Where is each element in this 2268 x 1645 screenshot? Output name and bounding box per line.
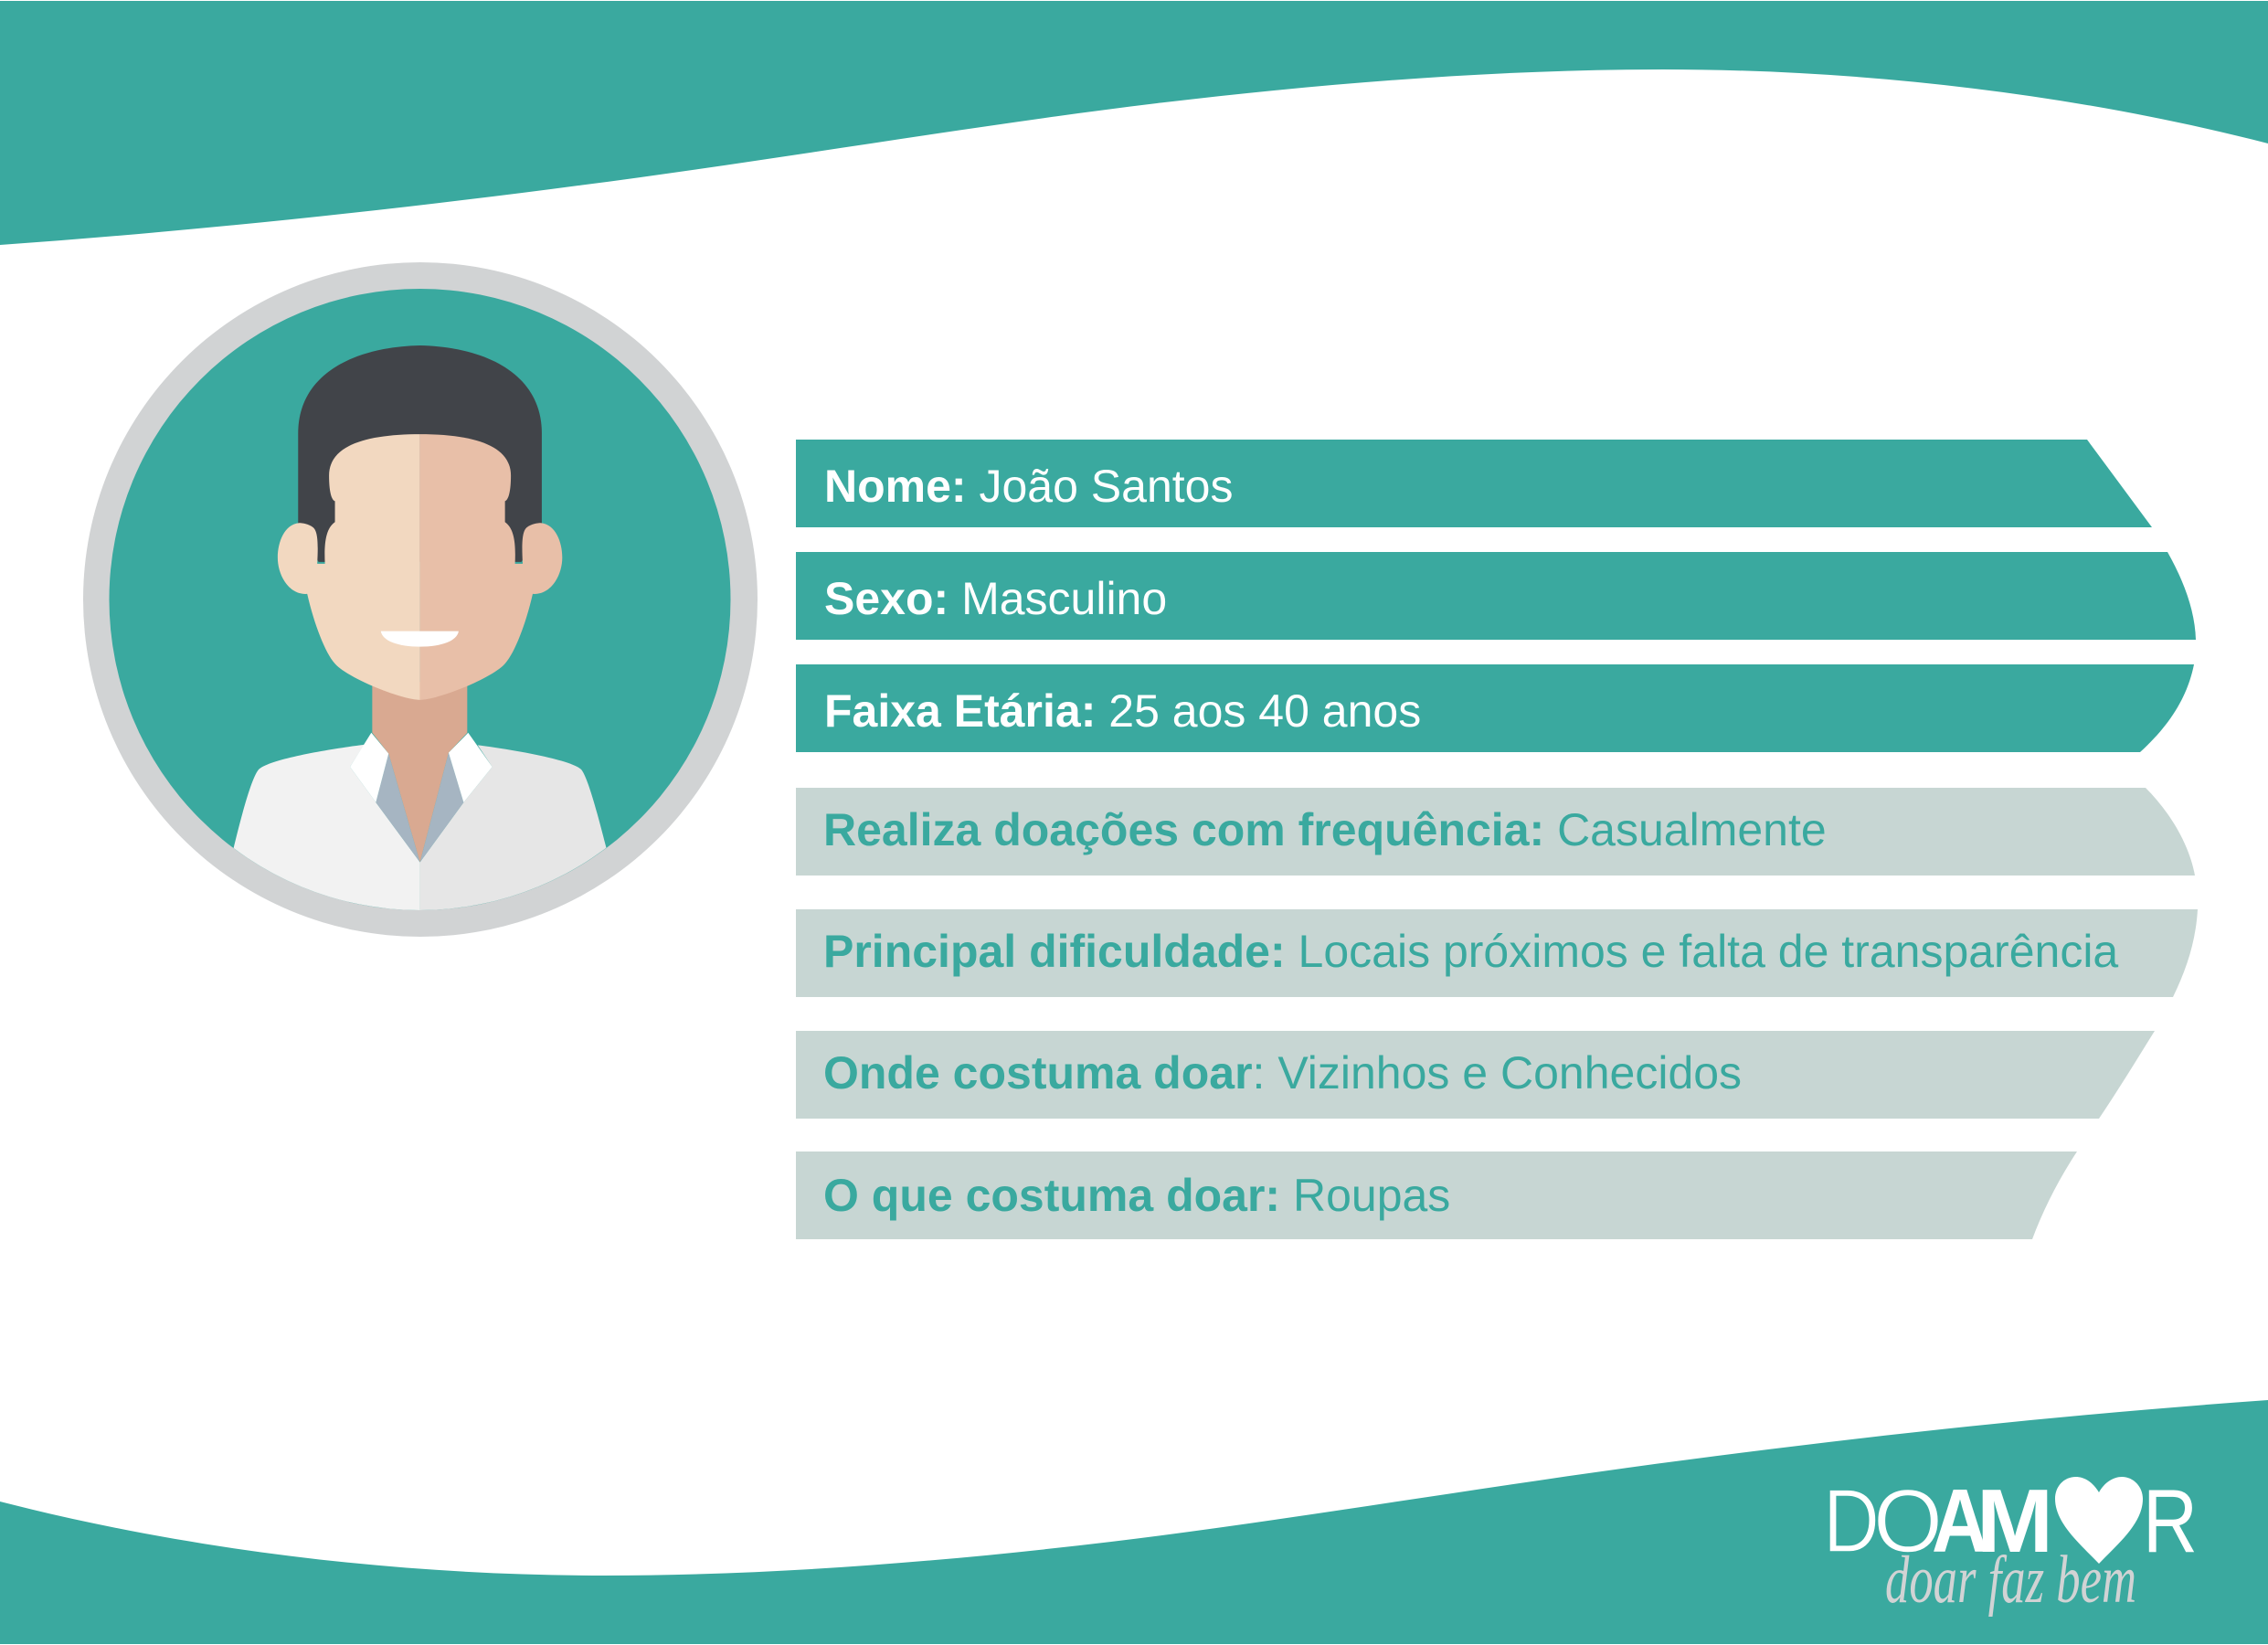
row: faixa etaria xyxy=(796,664,2194,752)
row: sexo: Sexo: Masculino xyxy=(824,573,1167,624)
row: dificuldade xyxy=(796,909,2198,997)
logo tagline: doar faz bem xyxy=(1885,1543,2136,1618)
avatar portrait xyxy=(83,262,758,937)
face right xyxy=(420,434,562,700)
neck xyxy=(372,682,467,863)
logo xyxy=(1823,1470,2198,1618)
row: o que doar xyxy=(796,1152,2077,1239)
bottom wave banner xyxy=(0,1400,2268,1644)
row: nome: Nome: João Santos xyxy=(824,461,1233,512)
hair xyxy=(298,345,542,562)
mouth xyxy=(381,631,459,647)
logo wordmark: A xyxy=(1932,1470,1988,1571)
row: frequencia xyxy=(796,788,2195,876)
row: frequencia: Realiza doações com frequência: Casualmente xyxy=(823,804,1827,855)
row: o que doar: O que costuma doar: Roupas xyxy=(823,1170,1450,1221)
row: dificuldade: Principal dificuldade: Locais próximos e falta de transparência xyxy=(823,926,2118,977)
row: onde doar xyxy=(796,1031,2155,1119)
logo heart xyxy=(2055,1477,2143,1564)
face left xyxy=(278,434,420,700)
logo wordmark: M xyxy=(1977,1470,2053,1571)
logo wordmark: R xyxy=(2143,1470,2198,1571)
collar xyxy=(350,733,493,802)
row: onde doar: Onde costuma doar: Vizinhos e Conhecidos xyxy=(823,1047,1742,1098)
logo wordmark: O xyxy=(1873,1470,1943,1571)
shirt xyxy=(234,745,607,921)
top wave banner xyxy=(0,1,2268,245)
logo wordmark: D xyxy=(1823,1470,1880,1571)
row: sexo xyxy=(796,552,2196,640)
row: faixa etaria: Faixa Etária: 25 aos 40 anos xyxy=(824,685,1421,737)
logo wordmark xyxy=(1823,1470,2198,1571)
inner shirt xyxy=(376,753,463,863)
row: nome xyxy=(796,440,2152,527)
